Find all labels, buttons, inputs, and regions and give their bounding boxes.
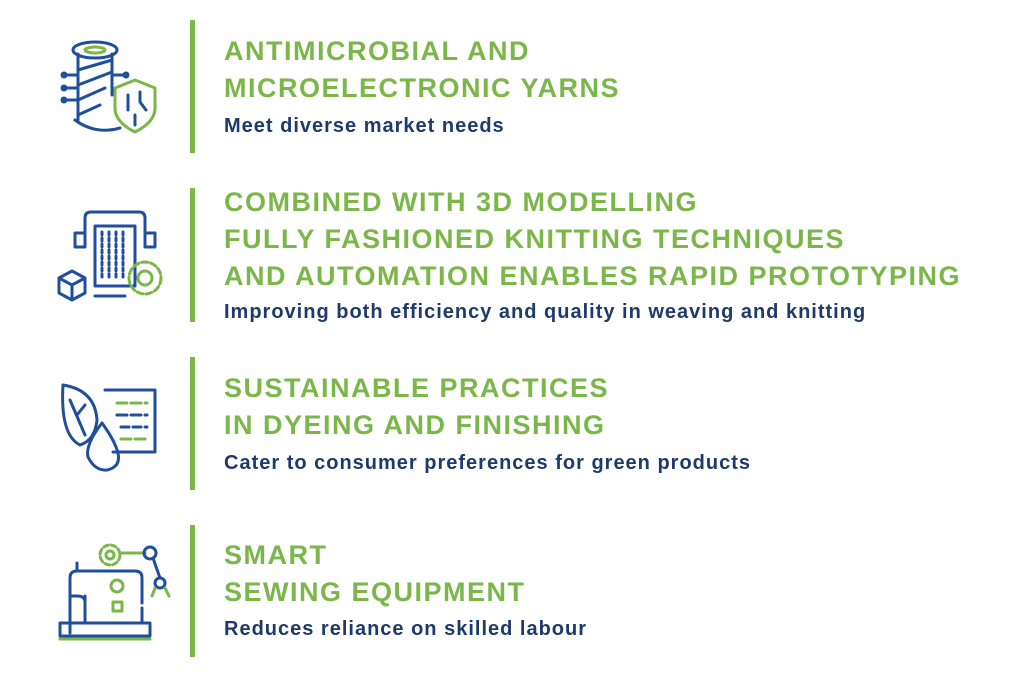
heading 3: IN DYEING AND FINISHING — [224, 410, 606, 440]
icon: yarn spool with shield — [60, 40, 156, 134]
heading 4 — [224, 540, 526, 607]
heading 2: AND AUTOMATION ENABLES RAPID PROTOTYPING — [224, 261, 961, 291]
heading 4: SMART — [224, 540, 328, 570]
heading 4: SEWING EQUIPMENT — [224, 577, 526, 607]
heading 2 — [224, 187, 961, 291]
icon: smart sewing machine — [58, 544, 170, 640]
bar 4 — [190, 525, 195, 657]
heading 2: FULLY FASHIONED KNITTING TECHNIQUES — [224, 224, 845, 254]
bar 1 — [190, 20, 195, 153]
heading 1: MICROELECTRONIC YARNS — [224, 73, 620, 103]
heading 1 — [224, 36, 620, 103]
bar 3 — [190, 357, 195, 490]
bar 2 — [190, 188, 195, 322]
subtitle 3: Cater to consumer preferences for green products — [224, 452, 751, 474]
heading 3 — [224, 373, 609, 440]
icon: leaf, drop, document — [61, 384, 156, 472]
heading 1: ANTIMICROBIAL AND — [224, 36, 530, 66]
subtitle 1: Meet diverse market needs — [224, 115, 505, 137]
heading 2: COMBINED WITH 3D MODELLING — [224, 187, 698, 217]
subtitle 2: Improving both efficiency and quality in weaving and knitting — [224, 301, 866, 323]
subtitle 4: Reduces reliance on skilled labour — [224, 618, 587, 640]
icon: knitting machine — [57, 210, 162, 302]
heading 3: SUSTAINABLE PRACTICES — [224, 373, 609, 403]
